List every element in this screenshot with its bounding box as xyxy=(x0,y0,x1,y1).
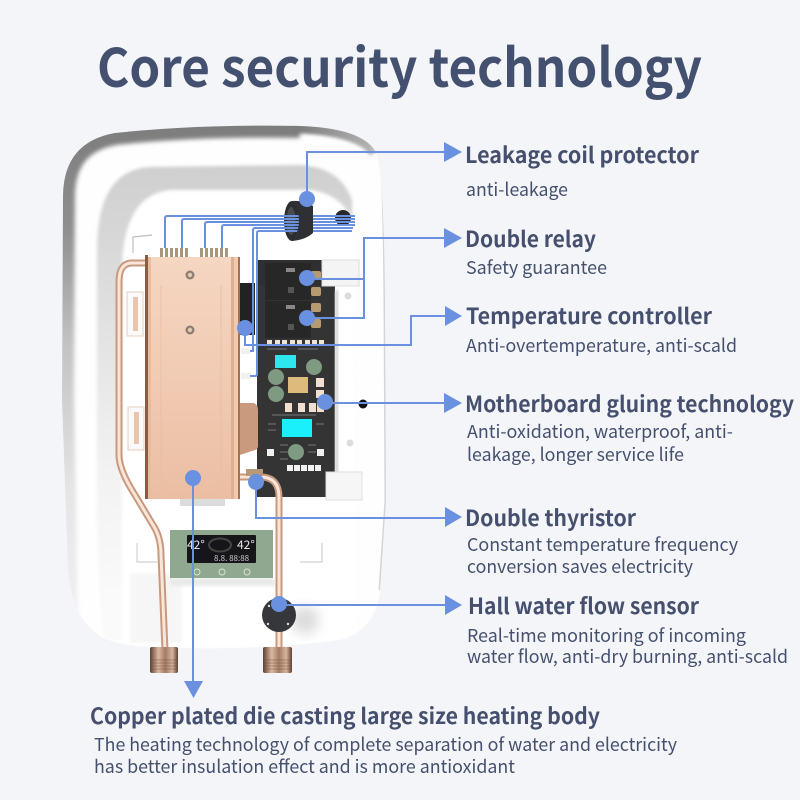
white connector row xyxy=(267,340,324,345)
green capacitors xyxy=(306,359,322,375)
control display panel: 42° xyxy=(187,536,205,553)
wires xyxy=(165,216,355,376)
control display panel xyxy=(170,530,273,578)
copper heating body xyxy=(145,248,258,506)
callout: copper plated heating body xyxy=(90,470,678,779)
callout: double relay: Double relay xyxy=(465,222,596,254)
callout: double thyristor: Double thyristor xyxy=(465,501,636,533)
callout: double relay xyxy=(299,222,607,326)
leakage coil ring front xyxy=(292,201,313,241)
callout: hall water flow sensor: Hall water flow sensor xyxy=(468,589,699,621)
leakage coil ring back xyxy=(284,201,351,241)
callout: leakage coil protector: anti-leakage xyxy=(466,176,568,202)
callout: copper plated heating body: Copper plated die casting large size heating body xyxy=(90,699,600,731)
callout: leakage coil protector: Leakage coil protector xyxy=(465,138,699,170)
callout: hall water flow sensor: water flow, anti-dry burning, anti-scald xyxy=(467,643,788,669)
callout: copper plated heating body: has better insulation effect and is more antioxidant xyxy=(94,753,515,779)
gold terminals xyxy=(160,248,228,257)
large cyan chip xyxy=(282,419,312,437)
callout: double thyristor: conversion saves electricity xyxy=(467,553,694,579)
circuit board xyxy=(240,260,362,500)
water heater illustration xyxy=(62,126,386,673)
callout: hall water flow sensor: Real-time monitoring of incoming xyxy=(467,622,746,648)
callout: motherboard gluing technology: leakage, longer service life xyxy=(467,441,684,467)
control display panel: 42° xyxy=(237,536,255,553)
white pads xyxy=(285,378,324,412)
heater casing xyxy=(62,126,386,648)
callout: motherboard gluing technology xyxy=(317,387,794,467)
callout: double relay: Safety guarantee xyxy=(466,254,607,280)
relays xyxy=(265,263,321,338)
control display panel: 8.8. 88:88 xyxy=(214,553,250,564)
hall sensor xyxy=(262,598,296,632)
callout: leakage coil protector xyxy=(299,138,699,207)
callout: motherboard gluing technology: Anti-oxidation, waterproof, anti- xyxy=(467,418,733,444)
callout: copper plated heating body: The heating technology of complete separation of water and electricity xyxy=(94,731,678,757)
callout: motherboard gluing technology: Motherboard gluing technology xyxy=(465,387,794,419)
callout: double thyristor xyxy=(248,474,739,579)
copper pipes xyxy=(119,263,279,650)
gold chip xyxy=(288,377,308,393)
callout: temperature controller: Anti-overtemperature, anti-scald xyxy=(466,332,737,358)
callout: temperature controller: Temperature controller xyxy=(466,299,712,331)
title: Core security technology xyxy=(97,27,702,103)
callout: temperature controller xyxy=(237,299,737,358)
black screw mark xyxy=(358,400,368,408)
callout: hall water flow sensor xyxy=(271,589,788,669)
callout: double thyristor: Constant temperature frequency xyxy=(467,531,739,557)
brass fittings xyxy=(150,647,292,673)
small cyan chip xyxy=(275,355,296,368)
